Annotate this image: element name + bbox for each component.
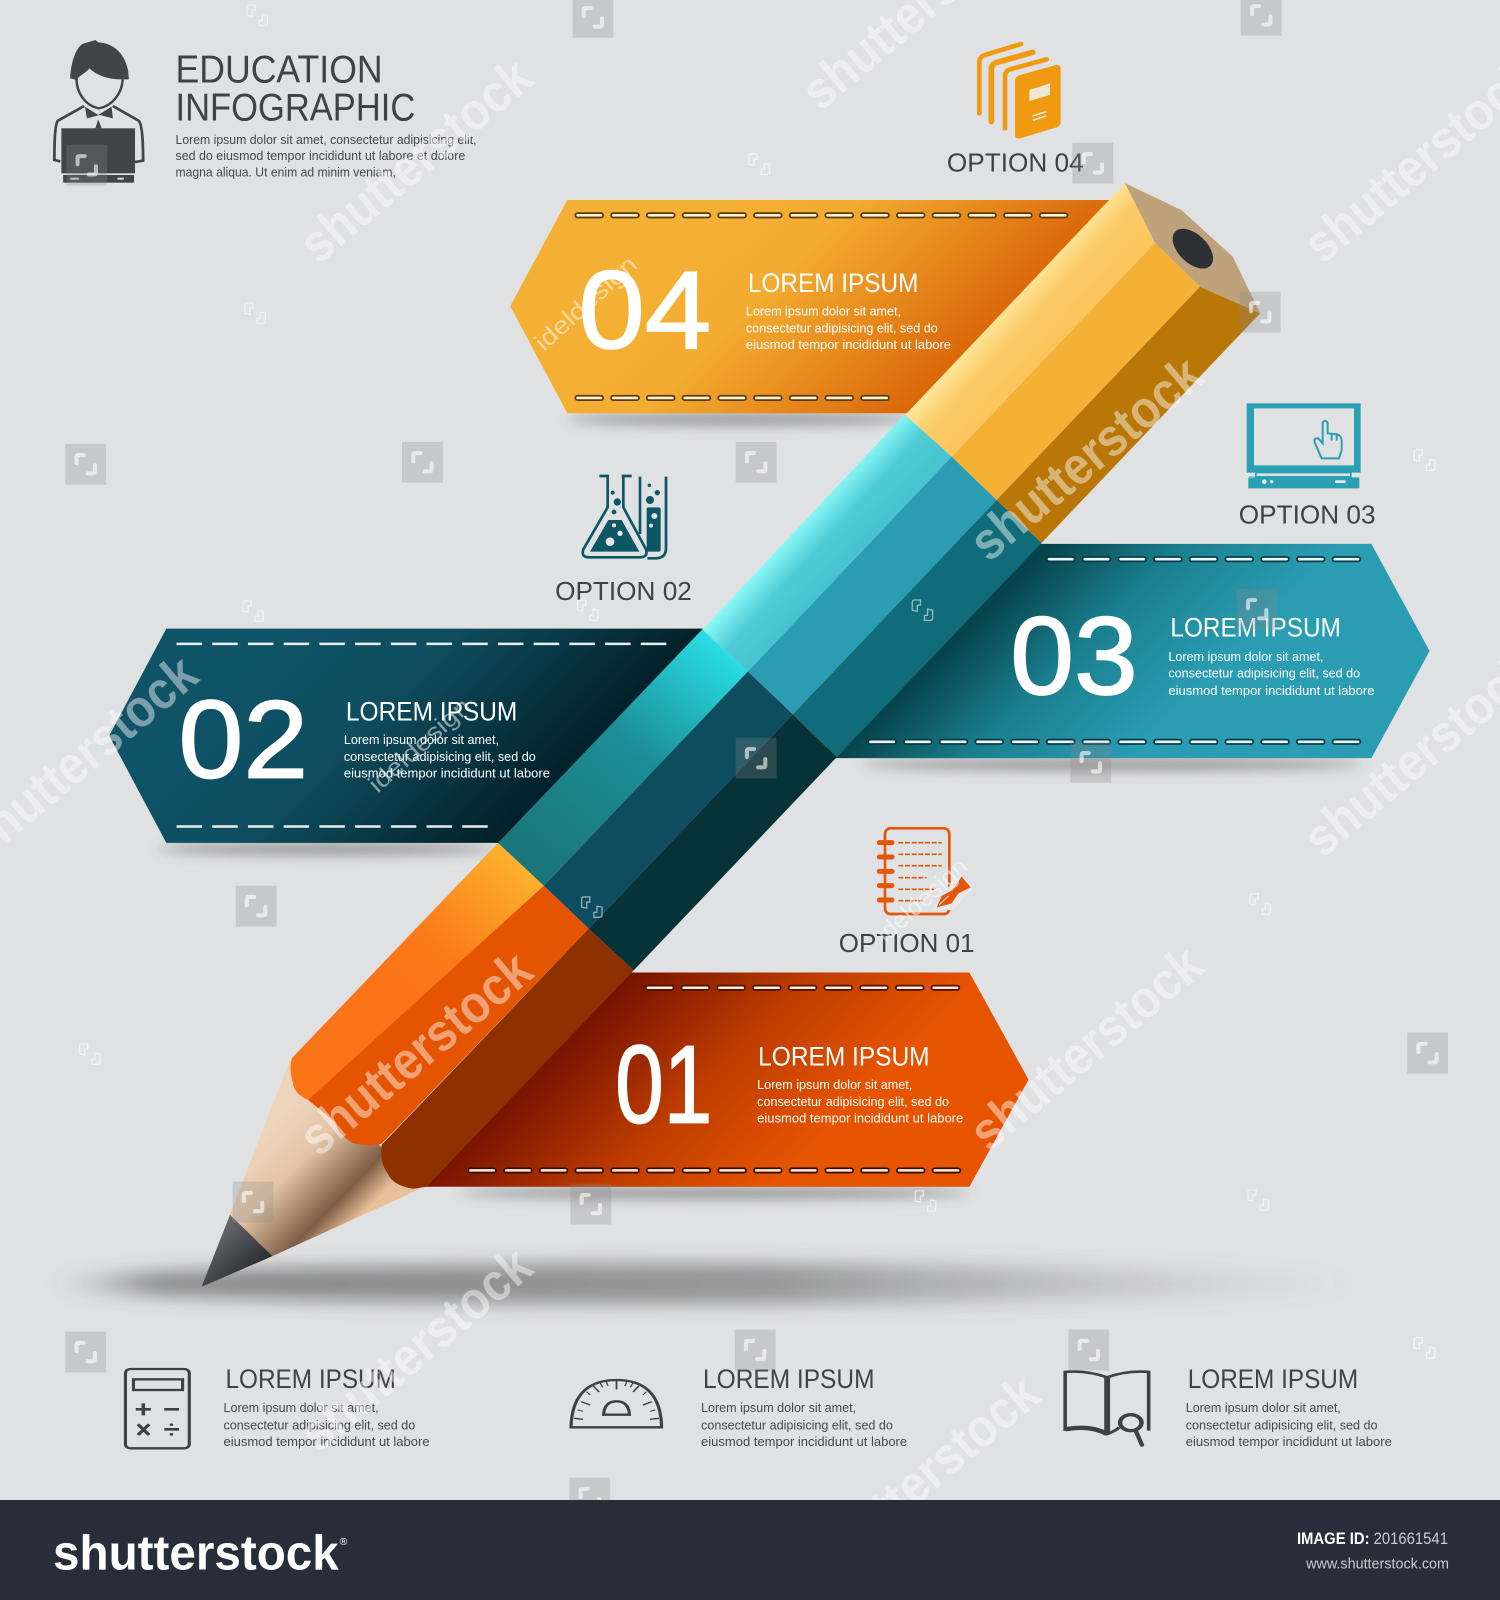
panel: ribbon 04: consectetur adipisicing elit, sed do [746, 321, 938, 336]
intro text: magna aliqua. Ut enim ad minim veniam, [176, 165, 396, 180]
watermark layer: shutterstock [288, 47, 544, 274]
text: consectetur adipisicing elit, sed do [701, 1418, 893, 1433]
website: www.shutterstock.com [1305, 1556, 1449, 1572]
watermark layer: shutterstock [795, 1363, 1051, 1591]
panel: ribbon 01 [410, 972, 1029, 1199]
panel: ribbon 04 [510, 200, 1122, 426]
pencil orange section [291, 843, 634, 1189]
bottom item: protractor [571, 1364, 907, 1449]
option 04 [947, 44, 1084, 177]
icon: notebook and pen [879, 828, 974, 914]
icon: person with laptop [54, 40, 143, 183]
panel: ribbon 03: 03 [1010, 595, 1138, 718]
heading: LOREM IPSUM [703, 1364, 874, 1394]
icon: calculator [125, 1369, 189, 1448]
text [1186, 1400, 1392, 1449]
title: EDUCATION [176, 49, 383, 92]
watermark layer: shutterstock [959, 934, 1214, 1162]
pencil wood tip [230, 1060, 420, 1256]
panel: ribbon 02: 02 [179, 679, 308, 802]
label: OPTION 01 [839, 930, 974, 958]
label: OPTION 04 [947, 149, 1084, 177]
pencil teal section [702, 414, 1042, 757]
text: Lorem ipsum dolor sit amet, [223, 1400, 379, 1415]
panel: ribbon 03: LOREM IPSUM [1170, 613, 1341, 643]
text: eiusmod tempor incididunt ut labore [1186, 1434, 1392, 1449]
panel: ribbon 04: LOREM IPSUM [748, 268, 918, 298]
panel: ribbon 01: LOREM IPSUM [758, 1041, 930, 1071]
panel: ribbon 04: Lorem ipsum dolor sit amet, [746, 303, 901, 318]
panel: ribbon 04: 04 [579, 249, 711, 372]
bottom item: book [1065, 1364, 1392, 1449]
label: OPTION 03 [1239, 501, 1376, 529]
intro text [176, 132, 477, 180]
panel: ribbon 01: eiusmod tempor incididunt ut labore [757, 1110, 963, 1125]
option 02 [555, 476, 692, 606]
pencil end lead [1165, 221, 1220, 276]
panel: ribbon 02 [109, 629, 719, 855]
image id: IMAGE ID: 201661541 [1297, 1530, 1448, 1548]
option 01 [839, 828, 974, 958]
text [701, 1400, 907, 1449]
heading: LOREM IPSUM [1188, 1364, 1358, 1394]
heading: LOREM IPSUM [226, 1364, 396, 1394]
header: education infographic [54, 40, 477, 183]
icon: laptop with pointer [1247, 403, 1361, 488]
panel: ribbon 01: Lorem ipsum dolor sit amet, [757, 1077, 912, 1092]
pencil lead [202, 1215, 272, 1287]
title: INFOGRAPHIC [176, 86, 415, 129]
pencil end cap [1125, 183, 1260, 313]
text: consectetur adipisicing elit, sed do [223, 1418, 415, 1433]
watermark layer: ideldesign [530, 251, 643, 356]
pencil yellow section [905, 183, 1260, 543]
watermark layer: shutterstock [959, 345, 1214, 572]
registered mark: ® [340, 1537, 348, 1548]
icon: lab flasks [583, 476, 666, 558]
footer logo: shutterstock [53, 1526, 340, 1580]
panel: ribbon 02: Lorem ipsum dolor sit amet, [344, 732, 499, 747]
footer bar [0, 1500, 1500, 1600]
bottom item: calculator [125, 1364, 430, 1449]
panel: ribbon 02: eiusmod tempor incididunt ut labore [344, 766, 550, 781]
panel: ribbon 03: eiusmod tempor incididunt ut labore [1168, 683, 1374, 698]
panel: ribbon 01: 01 [615, 1023, 712, 1146]
option 03 [1239, 403, 1376, 529]
text: eiusmod tempor incididunt ut labore [701, 1434, 907, 1449]
watermark layer: ideldesign [872, 853, 973, 948]
panel: ribbon 01: consectetur adipisicing elit, sed do [757, 1094, 949, 1109]
watermark layer: shutterstock [288, 1235, 544, 1463]
pencil [202, 183, 1260, 1287]
title [176, 49, 415, 129]
label: OPTION 02 [555, 578, 692, 606]
text: eiusmod tempor incididunt ut labore [223, 1434, 430, 1449]
panel: ribbon 04: eiusmod tempor incididunt ut labore [746, 337, 951, 352]
panel: ribbon 03: consectetur adipisicing elit, sed do [1168, 666, 1360, 681]
icon: protractor [571, 1380, 662, 1427]
intro text: sed do eiusmod tempor incididunt ut labore et dolore [176, 148, 465, 163]
text: Lorem ipsum dolor sit amet, [1186, 1400, 1341, 1415]
watermark layer: shutterstock [288, 940, 544, 1167]
ground shadow [51, 1263, 1357, 1304]
intro text: Lorem ipsum dolor sit amet, consectetur adipisicing elit, [176, 132, 477, 147]
panel: ribbon 03: Lorem ipsum dolor sit amet, [1168, 649, 1323, 664]
icon: book and magnifier [1065, 1372, 1149, 1445]
text [223, 1400, 430, 1449]
pencil dark teal section [498, 630, 837, 970]
text: consectetur adipisicing elit, sed do [1186, 1418, 1378, 1433]
icon: books [979, 44, 1061, 139]
panel: ribbon 03 [816, 544, 1430, 770]
panel: ribbon 02: LOREM IPSUM [346, 696, 517, 726]
panel: ribbon 02: consectetur adipisicing elit, sed do [344, 749, 536, 764]
watermark layer: ideldesign [363, 693, 476, 798]
text: Lorem ipsum dolor sit amet, [701, 1400, 856, 1415]
